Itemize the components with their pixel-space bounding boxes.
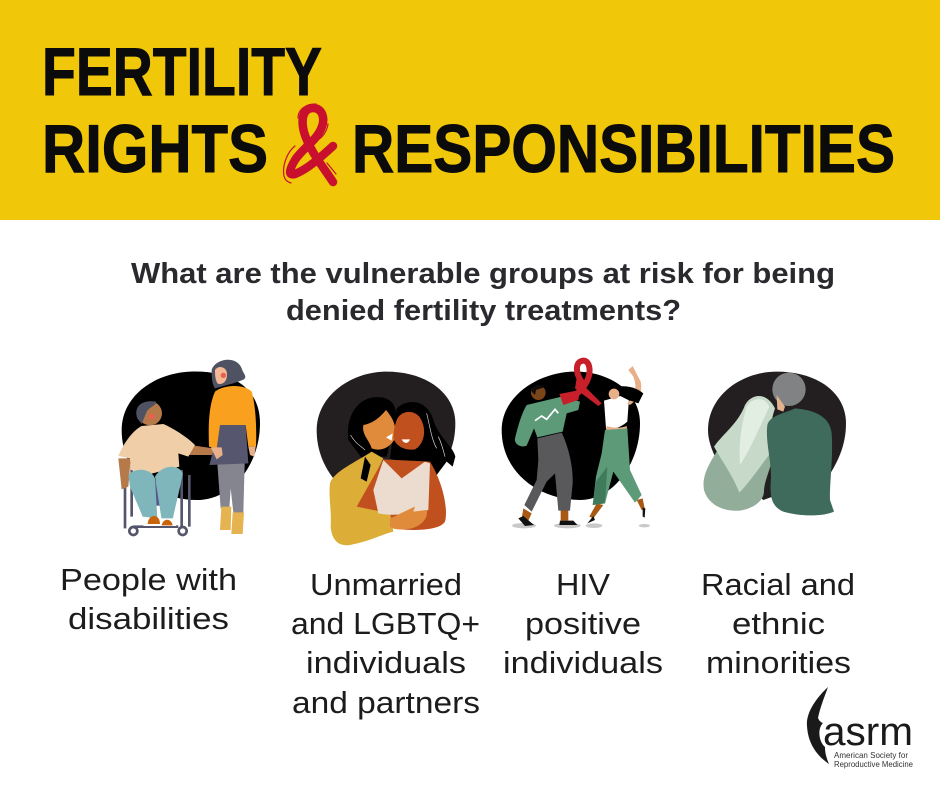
illustration: embracing couple — [317, 372, 455, 545]
label: racial and ethnic minorities — [701, 567, 855, 680]
logo: ASRM — [807, 687, 914, 769]
label: people with disabilities: disabilities — [68, 601, 229, 636]
label: unmarried and LGBTQ+: and partners — [292, 685, 480, 720]
logo: ASRM: Reproductive Medicine — [834, 760, 914, 769]
ampersand — [284, 104, 336, 183]
subtitle question — [131, 258, 835, 327]
subtitle question: denied fertility treatments? — [286, 295, 681, 327]
label: HIV positive individuals: positive — [525, 606, 641, 641]
logo: ASRM: asrm — [823, 710, 913, 754]
label: racial and ethnic minorities: ethnic — [732, 606, 825, 641]
label: HIV positive individuals: HIV — [556, 567, 610, 602]
illustration: HIV awareness dancers — [502, 361, 650, 528]
label: unmarried and LGBTQ+: individuals — [306, 645, 466, 680]
title: FERTILITY — [42, 34, 322, 110]
label: racial and ethnic minorities: Racial and — [701, 567, 855, 602]
label: racial and ethnic minorities: minorities — [706, 645, 851, 680]
label: unmarried and LGBTQ+: Unmarried — [310, 567, 462, 602]
label: people with disabilities: People with — [60, 562, 237, 597]
label: unmarried and LGBTQ+: and LGBTQ+ — [291, 606, 480, 641]
illustration: person in wheelchair and companion — [118, 360, 260, 535]
illustration: couple seen from behind — [704, 372, 846, 515]
title — [42, 34, 895, 187]
label: HIV positive individuals — [503, 567, 663, 680]
header banner — [0, 0, 940, 220]
label: unmarried and LGBTQ+ — [291, 567, 480, 720]
label: people with disabilities — [60, 562, 237, 636]
title: RIGHTS — [42, 111, 268, 187]
subtitle question: What are the vulnerable groups at risk for being — [131, 258, 835, 290]
label: HIV positive individuals: individuals — [503, 645, 663, 680]
logo: ASRM: American Society for — [834, 751, 908, 760]
